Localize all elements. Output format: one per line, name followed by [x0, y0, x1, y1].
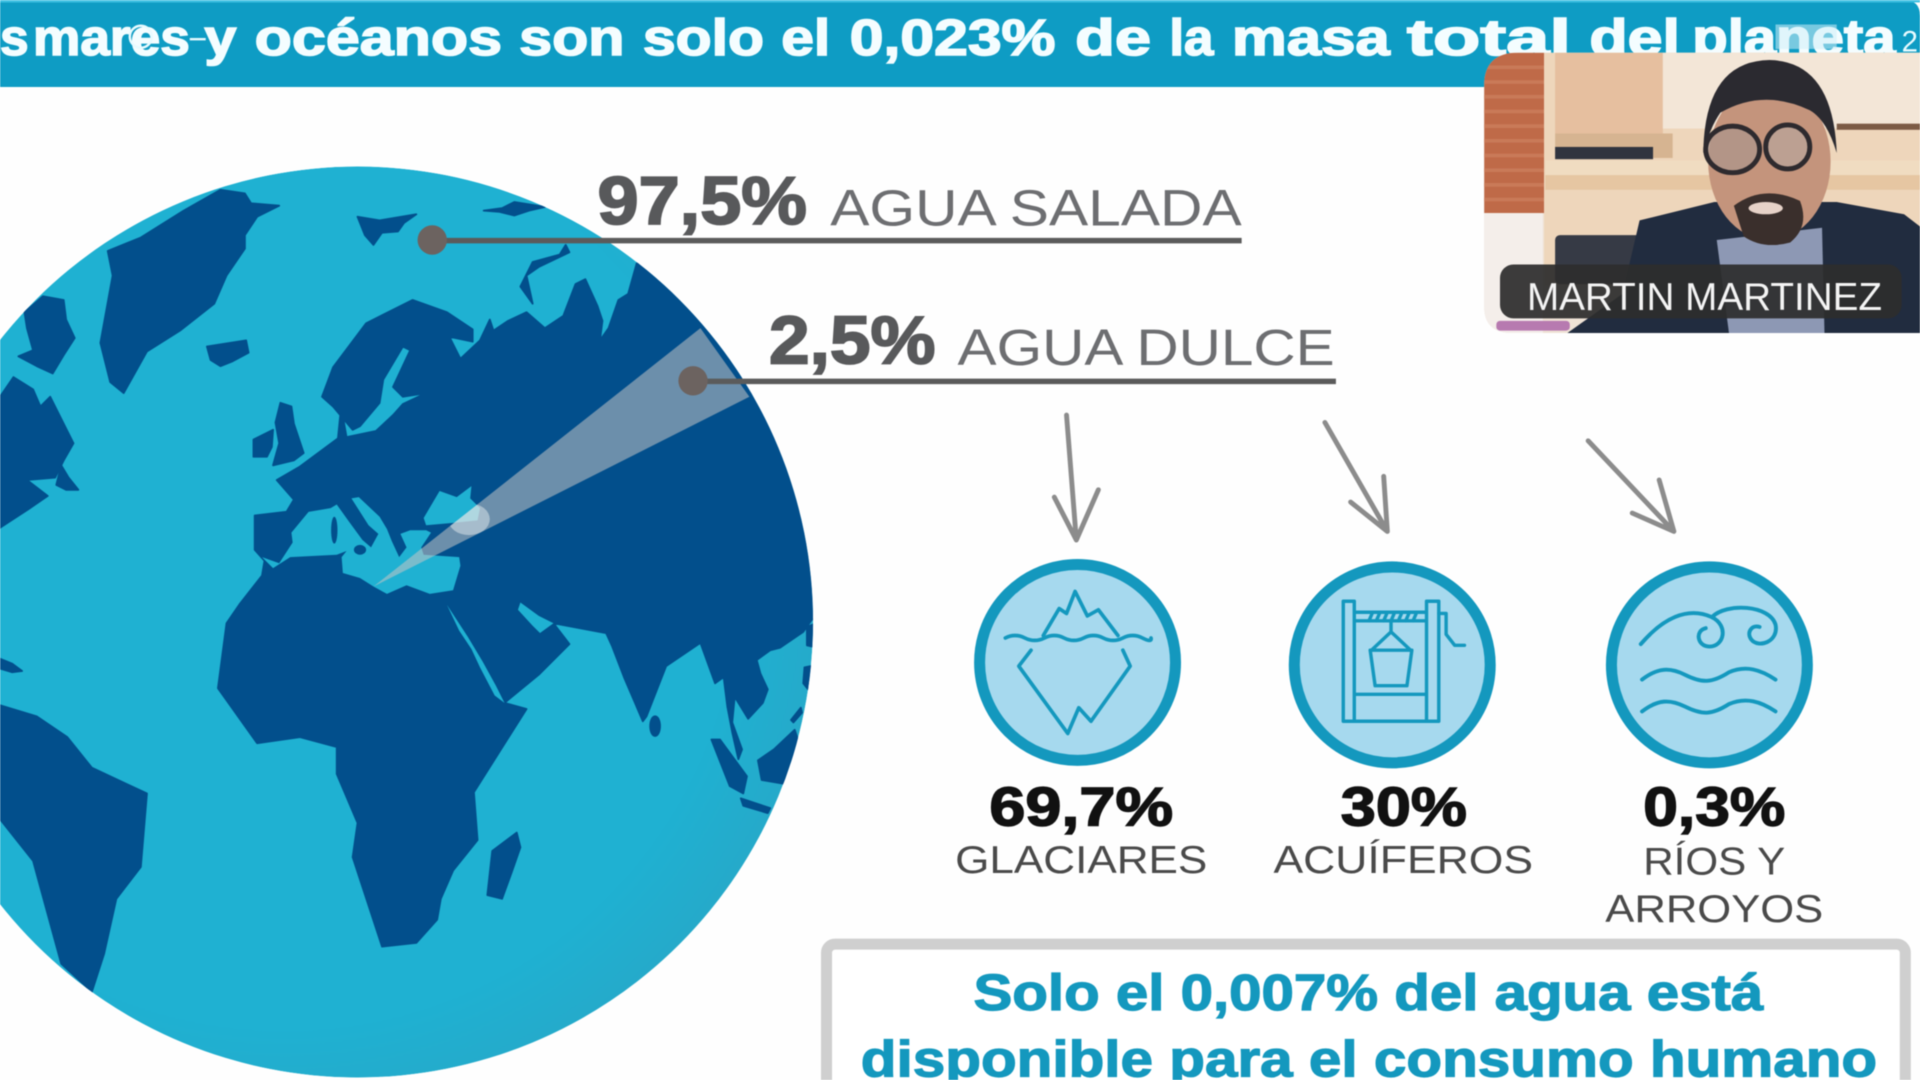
land: Sri Lanka — [650, 716, 660, 736]
callout: 2,5% agua dulce: 2,5% — [769, 304, 936, 379]
title banner: planeta — [1692, 8, 1896, 66]
title banner: la — [1169, 8, 1214, 66]
ocean disc — [0, 167, 813, 1078]
title banner: del — [1589, 8, 1680, 66]
stat: rios y arroyos: RÍOS Y — [1643, 840, 1785, 883]
land: Svalbard — [358, 214, 416, 245]
land: Novaya Zemlya — [520, 245, 569, 304]
callout: 97,5% agua salada: 97,5% — [598, 164, 807, 239]
stat: acuiferos: ACUÍFEROS — [1273, 839, 1533, 882]
land: Caribbean island — [0, 659, 22, 672]
Corsica and Sicily — [331, 517, 366, 555]
land: Greenland — [100, 190, 279, 393]
land: Japan sliver — [807, 624, 813, 647]
callout box: agua disponible: Solo el 0,007% del agua está — [973, 963, 1764, 1021]
globe — [0, 167, 857, 1078]
title banner — [0, 0, 1920, 87]
land: Borneo — [758, 730, 798, 784]
land: Iceland — [207, 340, 249, 366]
arrow: to glaciares — [1054, 415, 1098, 540]
sea: Mediterranean — [262, 497, 460, 594]
title banner: el — [781, 8, 830, 66]
icon: water well — [1294, 567, 1490, 763]
callout: 2,5% agua dulce — [678, 304, 1336, 396]
head — [1703, 60, 1837, 245]
window blind — [1484, 53, 1544, 213]
stat: acuiferos — [1273, 775, 1533, 882]
bottom-left colour smear — [1496, 321, 1570, 331]
title banner: masa — [1232, 8, 1390, 66]
sea: Black Sea — [424, 486, 480, 525]
stat: rios y arroyos: 0,3% — [1643, 775, 1785, 837]
land: Sumatra — [711, 740, 747, 793]
land: North America — [0, 377, 73, 539]
title banner: mares — [33, 8, 190, 66]
name tag: MARTIN MARTINEZ — [1527, 276, 1882, 319]
land: Sulawesi sliver — [791, 708, 802, 722]
callout box: agua disponible — [827, 944, 1905, 1080]
land: Ireland — [253, 430, 273, 457]
title banner: solo — [643, 8, 764, 66]
title banner: de — [1075, 8, 1151, 66]
shirt — [1717, 228, 1824, 333]
land: Java — [741, 798, 770, 813]
wedge: 2.5% sector — [373, 328, 749, 587]
icon: iceberg — [980, 564, 1176, 760]
land: Baffin island — [18, 296, 75, 373]
land: continents — [0, 190, 857, 992]
callout: 97,5% agua salada — [418, 164, 1242, 255]
printer — [1555, 235, 1643, 284]
webcam inset: speaker — [1484, 53, 1920, 333]
title banner: s — [0, 8, 29, 66]
land: Eurasia and Africa — [218, 245, 857, 947]
icon: waves — [1611, 567, 1807, 763]
stat: rios y arroyos: ARROYOS — [1605, 888, 1823, 931]
land: Newfoundland — [56, 465, 78, 490]
arrow: to acuiferos — [1325, 422, 1387, 531]
land: United Kingdom — [273, 403, 304, 465]
stat: glaciares: 69,7% — [989, 775, 1173, 837]
land: Franz Josef islands — [484, 202, 545, 216]
land: South America — [0, 700, 147, 992]
suit — [1567, 202, 1920, 333]
title banner: y — [204, 8, 237, 66]
land: Philippines sliver — [803, 666, 811, 689]
title banner: océanos — [255, 8, 502, 66]
wall below blind — [1484, 213, 1543, 333]
stat: rios y arroyos — [1605, 775, 1823, 931]
land: Madagascar — [487, 833, 520, 899]
stat: glaciares: GLACIARES — [955, 839, 1207, 882]
shelf unit — [1544, 53, 1920, 285]
stat: acuiferos: 30% — [1341, 775, 1467, 837]
stat: glaciares — [955, 775, 1207, 882]
callout: 97,5% agua salada: AGUA SALADA — [830, 178, 1242, 236]
callout: 2,5% agua dulce: AGUA DULCE — [958, 318, 1335, 376]
title banner: 2 — [1902, 25, 1918, 58]
title banner: 0,023% — [850, 8, 1056, 66]
arrow: to rios — [1588, 441, 1674, 531]
sea: Red Sea — [447, 605, 504, 703]
seas: Mediterranean, Black Sea, Red Sea, Persian Gulf — [262, 486, 553, 703]
sea: Persian Gulf — [518, 602, 553, 633]
title banner: son — [519, 8, 624, 66]
title banner: total — [1407, 8, 1571, 66]
